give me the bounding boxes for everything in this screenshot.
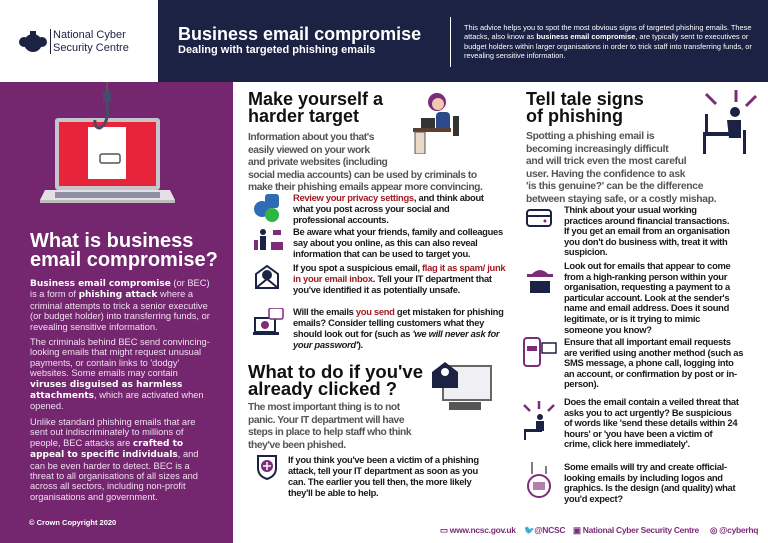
- heading: [30, 230, 218, 271]
- intro text: [248, 402, 412, 451]
- panel: harder target: [248, 89, 506, 350]
- intro text: they've been phished.: [248, 440, 346, 451]
- icon: urgent person: [523, 401, 555, 440]
- icon: spy: [527, 270, 553, 293]
- icon: envelope: [255, 264, 279, 289]
- intro text: and will trick even the most careful: [526, 156, 686, 167]
- heading: email compromise?: [30, 249, 218, 271]
- item: financial: Think about your usual working practices around financial transactions. If you get an email from an organisation you don't do business with, treat it with suspicion.: [564, 204, 730, 257]
- icon: hacked laptop with hook: [40, 82, 175, 203]
- icon: card: [526, 209, 552, 227]
- logo text: Security Centre: [53, 42, 129, 54]
- header intro text: This advice helps you to spot the most obvious signs of targeted phishing emails. These attacks, also know as business email compromise, are typically sent to executives or budget holders within larger organisations in order to trick staff into transferring funds, or revealing sensitive information.: [464, 23, 752, 60]
- logo text: [50, 29, 129, 54]
- heading: harder target: [248, 106, 359, 126]
- title: Business email compromise: [178, 24, 421, 44]
- intro text: [526, 131, 716, 205]
- heading: [248, 361, 423, 399]
- heading: Make yourself a: [248, 89, 383, 109]
- illustration: woman at desk: [413, 93, 459, 154]
- item: verify: Ensure that all important email requests are verified using another method (such as SMS message, a phone call, logging into an account, or confirmation by post or in-person).: [564, 336, 743, 389]
- heading: [248, 89, 384, 126]
- heading: What is business: [30, 230, 193, 252]
- heading: of phishing: [526, 106, 623, 126]
- intro text: Spotting a phishing email is: [526, 131, 654, 142]
- footer links: ◎ @cyberhq: [710, 525, 758, 535]
- footer links: ▣ National Cyber Security Centre: [573, 525, 699, 535]
- intro text: make their phishing emails appear more convincing.: [248, 182, 482, 193]
- heading: What to do if you've: [248, 361, 423, 382]
- body text: Business email compromise (or BEC) is a form of phishing attack where a criminal attempts to trick a senior executive (or budget holder) into transferring funds, or revealing sensitive information.: [30, 278, 210, 332]
- intro text: Information about you that's: [248, 132, 374, 143]
- intro text: between staying safe, or a costly mishap.: [526, 194, 716, 205]
- icon: laptop chat: [253, 308, 284, 335]
- icon: crest: [19, 31, 47, 52]
- item: flag spam: If you spot a suspicious email, flag it as spam/ junk in your email inbox. Tell your IT department that you've identified it as potentially unsafe.: [293, 262, 505, 295]
- intro text: user. Having the confidence to ask: [526, 169, 685, 180]
- panel: what is BEC: [0, 82, 233, 543]
- intro text: steps in place to help staff who think: [248, 427, 411, 438]
- intro text: [248, 132, 482, 193]
- footer links: [440, 525, 758, 535]
- icon: social: [254, 194, 279, 222]
- heading: [526, 89, 644, 126]
- body text: Unlike standard phishing emails that are sent out indiscriminately to millions of people, BEC attacks are crafted to appeal to specific individuals, and can be even harder to detect. BEC is a threat to all organisations of all sizes and across all sectors, including non-profit organisations and government.: [30, 417, 198, 502]
- icon: phone and monitor: [523, 337, 557, 367]
- intro text: social media accounts) can be used by criminals to: [248, 170, 477, 181]
- footer links: ▭ www.ncsc.gov.uk: [440, 525, 516, 535]
- icon: computer with skull email: [432, 362, 492, 410]
- heading: Tell tale signs: [526, 89, 644, 109]
- logo text: National Cyber: [53, 29, 126, 41]
- copyright: © Crown Copyright 2020: [29, 518, 116, 527]
- icon: person at desk with arrows: [703, 90, 757, 154]
- icon: family: [254, 229, 283, 250]
- item: high ranking: Look out for emails that appear to come from a high-ranking person within your organisation, requesting a payment to a particular account. Look at the sender's name and email address. Does it sound legitimate, or is it trying to mimic someone you know?: [564, 260, 730, 335]
- intro text: and private websites (including: [248, 157, 387, 168]
- footer links: 🐦@NCSC: [524, 525, 565, 535]
- heading: already clicked ?: [248, 378, 397, 399]
- panel: tell tale signs: [523, 89, 757, 504]
- header logo area: [0, 0, 158, 82]
- intro text: easily viewed on your work: [248, 145, 370, 156]
- item: friends and family: Be aware what your friends, family and colleagues say about you online, as this can also reveal information that can be used to target you.: [293, 226, 503, 259]
- item: veiled threat: Does the email contain a veiled threat that asks you to act urgently? Be suspicious of words like 'send these details within 24 hours' or 'you have been a victim of crime, click here immediately'.: [564, 396, 739, 449]
- intro text: 'is this genuine?' can be the difference: [526, 181, 703, 192]
- intro text: The most important thing is to not: [248, 402, 400, 413]
- item: tell IT: If you think you've been a victim of a phishing attack, tell your IT department as soon as you can. The earlier you tell then, the more likely they'll be able to help.: [288, 454, 479, 498]
- item: privacy settings: Review your privacy settings, and think about what you post across your social and professional accounts.: [293, 192, 484, 225]
- intro text: panic. Your IT department will have: [248, 415, 404, 426]
- item: logos: Some emails will try and create official-looking emails by including logos and graphics. Is the design (and quality) what you'd expect?: [564, 461, 735, 504]
- body text: [30, 278, 210, 502]
- header banner: [158, 0, 768, 82]
- body text: The criminals behind BEC send convincing-looking emails that might request unusual payments, or contain links to 'dodgy' websites. Some emails may contain viruses disguised as harmless attachments, which are activated when opened.: [30, 337, 210, 411]
- item: emails you send: Will the emails you send get mistaken for phishing emails? Consider telling customers what they should look out for (such as 'we will never ask for your password').: [293, 306, 504, 350]
- intro text: becoming increasingly difficult: [526, 144, 668, 155]
- subtitle: Dealing with targeted phishing emails: [178, 44, 375, 56]
- icon: hooked logo: [527, 462, 551, 498]
- icon: shield: [257, 455, 277, 480]
- panel: already clicked: [248, 361, 492, 498]
